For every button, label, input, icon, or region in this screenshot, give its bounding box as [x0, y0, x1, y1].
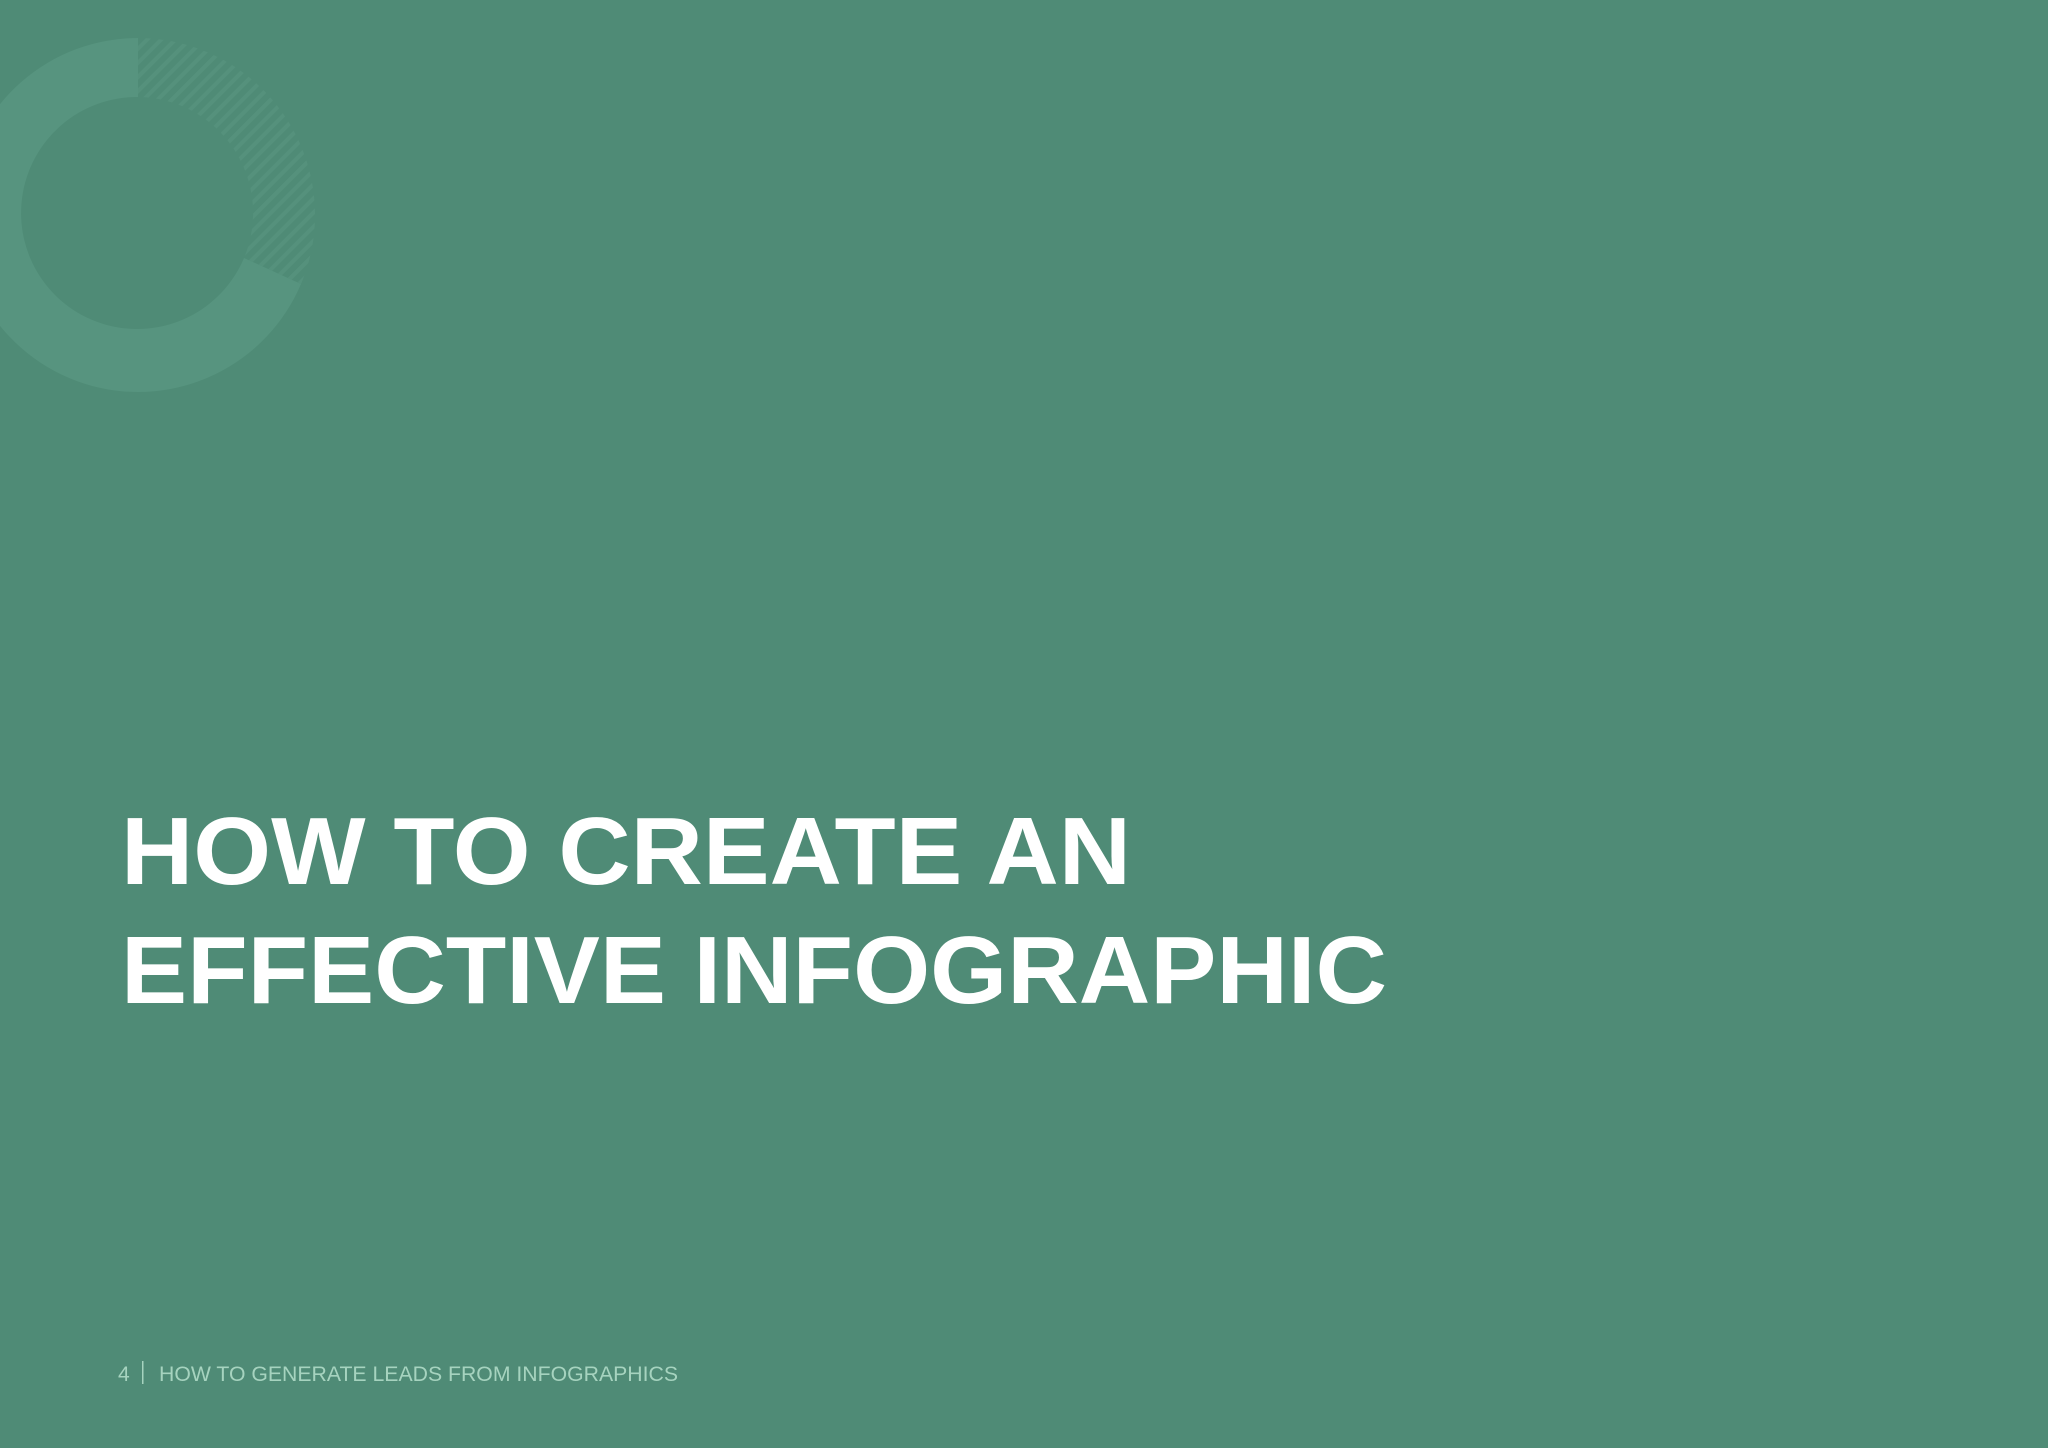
- title: HOW TO CREATE AN: [121, 798, 1131, 905]
- footer: HOW TO GENERATE LEADS FROM INFOGRAPHICS: [159, 1363, 678, 1386]
- title: [121, 798, 1387, 1024]
- title: EFFECTIVE INFOGRAPHIC: [121, 917, 1387, 1024]
- icon: decorative donut ring: [0, 38, 315, 392]
- footer: 4: [118, 1363, 130, 1386]
